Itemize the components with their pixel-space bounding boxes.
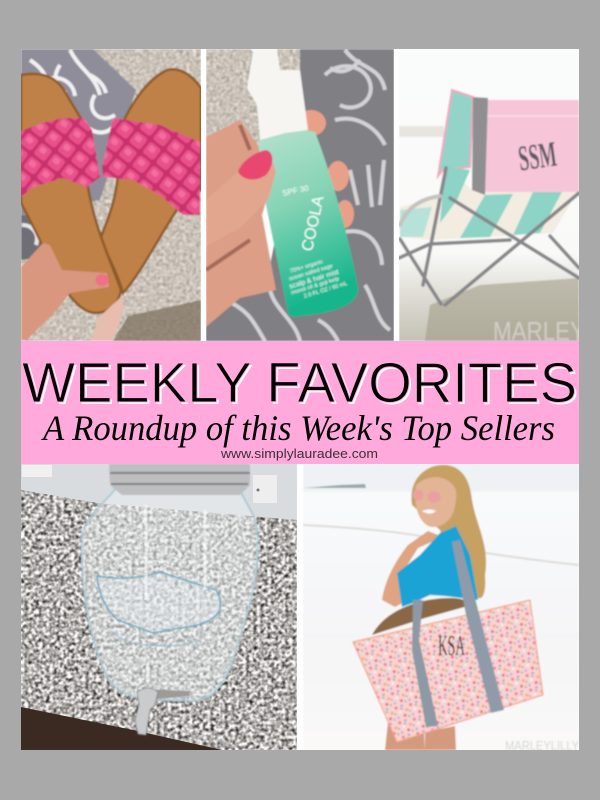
product description: scalp & hair mist: [289, 269, 340, 291]
metal chair frame: [399, 168, 579, 305]
photo: woman with floral tote bag on beach: KSA: [438, 631, 465, 662]
dark cabinet: [21, 707, 222, 750]
left woven strap: [21, 117, 100, 198]
wet sand reflection: [425, 278, 579, 341]
thumb over bottle: [208, 162, 276, 238]
metal spigot: [135, 688, 190, 735]
granite counter: [21, 488, 297, 750]
left sandal sole: [21, 74, 121, 313]
pink title banner: [21, 341, 579, 464]
title shadow: WEEKLY FAVORITES: [24, 353, 579, 417]
lower embossed arc: [110, 630, 198, 646]
product description: 70%+ organic: [289, 259, 324, 275]
lid band: [110, 473, 250, 484]
grey strap: [472, 97, 488, 195]
subtitle: A Roundup of this Week's Top Sellers: [41, 408, 555, 448]
glass jar: [82, 464, 258, 735]
jar embossed label: [97, 572, 220, 633]
photo: COOLA scalp and hair mist: [206, 49, 394, 341]
thumb nail: [96, 274, 108, 286]
hand holding sandal: [21, 243, 109, 340]
floor shadow: [113, 300, 201, 341]
pink chair back panel: [485, 100, 579, 192]
zip line: [487, 115, 579, 117]
beach background: [399, 238, 579, 341]
smile: [422, 510, 436, 514]
product description: [288, 259, 348, 299]
website url: www.simplylauradee.com: [220, 446, 378, 461]
toes at bottom: [92, 296, 124, 341]
right sandal sole: [100, 69, 201, 293]
finger creases: [206, 125, 250, 270]
product description: ocean salted sage: [288, 263, 334, 282]
bottle cap: [247, 49, 308, 140]
product description: monoi oil & goji kelp: [291, 276, 340, 296]
patterned rug: [21, 49, 136, 260]
fingers behind bottle: [304, 109, 355, 229]
COOLA brand: COOLA: [299, 194, 328, 253]
face: [415, 477, 456, 527]
carpet background: [21, 49, 201, 341]
photo: glass drink dispenser on granite: [21, 464, 297, 750]
blue shirt: [397, 526, 478, 607]
shoreline streak: [303, 525, 579, 565]
sunglasses: [412, 490, 440, 503]
bottle: [247, 49, 358, 317]
watermark: MARLEYLILLY: [505, 738, 579, 753]
photo: pink monogrammed beach chair: [399, 88, 579, 341]
striped seat: [400, 167, 579, 240]
straw hat: [372, 598, 468, 635]
wall outlet: [253, 475, 277, 503]
watermark: MARLEY: [493, 316, 585, 346]
distant island: [303, 484, 366, 488]
hand: [206, 120, 276, 327]
horizon band: [399, 126, 444, 137]
bag front handle: [412, 600, 438, 727]
product description: 2.0 FL OZ / 60 mL: [303, 281, 348, 300]
bag shoulder strap: [452, 540, 504, 713]
floral tote bag: [353, 600, 543, 742]
right woven strap: [100, 112, 201, 220]
light switch plate: [22, 465, 52, 477]
wall: [21, 464, 297, 524]
beach background: [303, 464, 579, 750]
thumb nail painted pink: [238, 150, 272, 180]
metal lid: [109, 464, 250, 495]
photo: woman with floral tote bag on beach: [303, 464, 579, 753]
monogram SSM: SSM: [516, 134, 559, 178]
title: WEEKLY FAVORITES: [22, 351, 577, 415]
hair: [411, 465, 486, 598]
legs: [385, 722, 456, 750]
photo: pink woven sandals: [21, 49, 201, 341]
carpet background: [206, 49, 301, 145]
inner tube highlight: [146, 505, 205, 600]
grey damask rug: [206, 49, 394, 341]
teal seat side panel: [438, 90, 473, 176]
SPF label: SPF 30: [282, 183, 310, 198]
arm: [382, 531, 438, 607]
